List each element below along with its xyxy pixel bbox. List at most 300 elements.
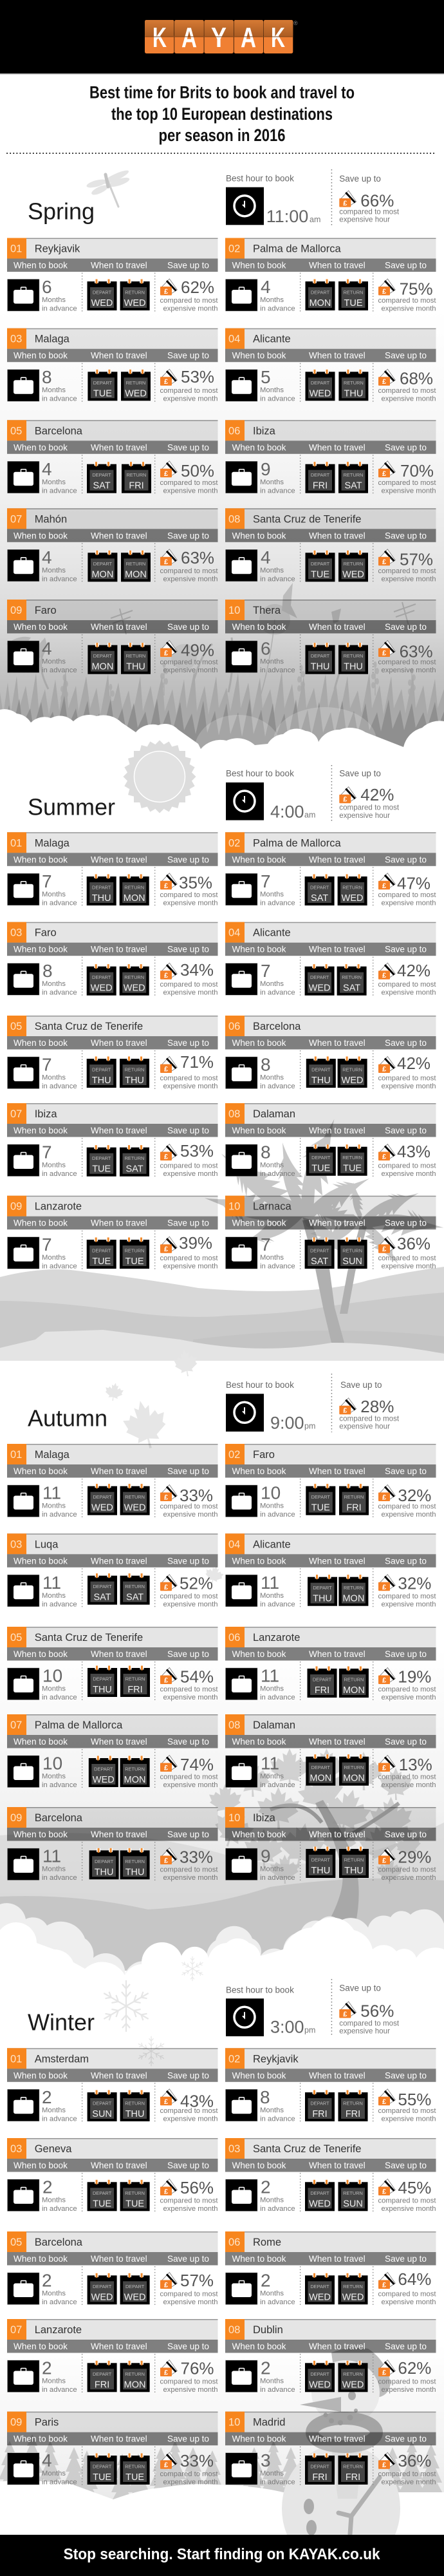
save up to: 52% <box>180 1574 213 1593</box>
card header: 06 <box>228 425 240 437</box>
KAYAK logo: ® <box>293 20 298 26</box>
card header <box>225 1807 436 1841</box>
when to travel: RETURN <box>125 1155 144 1161</box>
when to book: in advance <box>42 487 77 495</box>
when to travel <box>89 1756 150 1787</box>
when to travel <box>88 1573 150 1605</box>
card header: When to travel <box>309 2070 365 2080</box>
when to book: in advance <box>260 305 295 313</box>
when to book: in advance <box>42 2386 77 2394</box>
card header: When to book <box>232 1126 286 1135</box>
card header <box>7 1196 217 1229</box>
when to book: Months <box>42 980 66 988</box>
when to book <box>225 639 295 674</box>
card header: Save up to <box>167 260 209 270</box>
when to travel: MON <box>124 1775 146 1785</box>
card header: 08 <box>228 2324 240 2336</box>
save up to <box>160 2271 218 2306</box>
when to travel <box>87 964 149 996</box>
when to travel <box>306 1056 367 1088</box>
section header: Winter: 3:00 <box>270 2018 304 2037</box>
save up to: 63% <box>181 548 214 567</box>
save up to: expensive month <box>163 1511 217 1519</box>
card header: When to book <box>14 2342 68 2351</box>
save up to <box>160 278 218 313</box>
card header: Dublin <box>253 2324 283 2336</box>
when to travel: SAT <box>93 1593 111 1603</box>
card header: 04 <box>228 1539 240 1550</box>
save up to: compared to most <box>160 2470 218 2478</box>
save up to: 70% <box>400 461 434 480</box>
when to book: 3 <box>261 2450 271 2470</box>
card header: 02 <box>228 2053 240 2065</box>
when to travel: WED <box>342 1075 364 1086</box>
save up to: £ <box>382 558 386 566</box>
save up to: expensive month <box>381 1170 436 1178</box>
section header: Summer: compared to most <box>339 804 400 812</box>
header bar <box>0 0 444 75</box>
when to travel: THU <box>125 1075 144 1086</box>
when to book: in advance <box>260 2205 295 2213</box>
background: autumn gradient and hills <box>0 1649 444 1971</box>
when to travel: DEPART <box>93 1494 112 1500</box>
when to travel <box>305 551 368 582</box>
save up to <box>378 2178 436 2213</box>
when to book: Months <box>42 1592 66 1600</box>
card: Alicante <box>225 1533 436 1608</box>
card header: Ibiza <box>253 425 276 437</box>
when to book: 6 <box>42 277 52 297</box>
card header <box>7 1103 217 1137</box>
when to book: Months <box>260 2470 284 2477</box>
save up to: £ <box>164 972 168 980</box>
when to travel: SAT <box>93 481 111 491</box>
card: Malaga <box>7 1444 218 1519</box>
when to travel: THU <box>344 662 363 672</box>
card header: 05 <box>10 425 22 437</box>
when to travel: TUE <box>93 2199 111 2209</box>
when to book <box>225 2087 295 2123</box>
save up to: expensive month <box>163 989 217 997</box>
when to book <box>8 459 77 495</box>
when to travel <box>306 1144 367 1176</box>
illustration: spring plants <box>6 583 416 718</box>
card header: When to book <box>232 945 286 954</box>
save up to: compared to most <box>378 891 436 899</box>
save up to <box>160 960 218 997</box>
save up to: compared to most <box>378 297 436 305</box>
card: Faro <box>7 600 218 674</box>
when to travel: DEPART <box>93 2371 112 2377</box>
card header: When to travel <box>309 2254 365 2264</box>
when to book <box>225 1573 295 1608</box>
when to book: Months <box>42 1502 66 1510</box>
save up to: £ <box>382 882 386 890</box>
card header: 06 <box>228 1632 240 1643</box>
card header: When to travel <box>91 2070 147 2080</box>
save up to <box>378 1142 436 1178</box>
when to travel: RETURN <box>126 653 145 659</box>
when to travel: FRI <box>95 2380 109 2390</box>
when to travel: RETURN <box>344 561 363 567</box>
card header: When to travel <box>91 2342 147 2351</box>
footer: Stop searching. Start finding on KAYAK.co.uk <box>64 2546 380 2563</box>
save up to: compared to most <box>160 1162 218 1170</box>
when to book: in advance <box>260 1874 295 1882</box>
when to book: in advance <box>260 667 295 674</box>
when to travel: RETURN <box>125 290 145 295</box>
when to book <box>8 871 77 907</box>
card header: When to travel <box>309 1737 365 1747</box>
when to book: in advance <box>42 667 77 674</box>
card header: Save up to <box>385 855 427 864</box>
when to travel: RETURN <box>343 2190 363 2196</box>
when to travel: THU <box>311 662 329 672</box>
card header: When to travel <box>309 1038 365 1048</box>
card header: Palma de Mallorca <box>253 837 341 849</box>
card header: 08 <box>228 513 240 525</box>
section header: Winter: expensive hour <box>339 2027 390 2035</box>
when to travel: WED <box>309 2199 331 2209</box>
section header: Autumn: £ <box>343 1407 347 1415</box>
when to travel: THU <box>93 1685 112 1695</box>
card: Palma de Mallorca <box>225 238 436 313</box>
save up to: £ <box>382 1245 386 1253</box>
KAYAK logo: Y <box>211 22 227 53</box>
save up to: 55% <box>398 2090 431 2109</box>
card header: When to travel <box>91 1218 147 1228</box>
save up to: £ <box>164 1494 168 1502</box>
save up to: compared to most <box>160 567 218 575</box>
when to book: Months <box>260 2378 284 2385</box>
card header <box>7 922 217 956</box>
when to travel: MON <box>310 298 331 308</box>
section header: Autumn <box>28 1374 400 1432</box>
when to travel: DEPART <box>93 2463 112 2469</box>
when to travel: DEPART <box>92 974 111 980</box>
card header: When to book <box>14 622 68 632</box>
when to book: in advance <box>42 2115 77 2123</box>
when to book: Months <box>260 1502 284 1510</box>
card header: When to book <box>232 531 286 540</box>
when to travel: THU <box>92 893 111 904</box>
save up to: expensive month <box>381 989 436 997</box>
when to travel: DEPART <box>310 885 329 891</box>
card header <box>7 1807 217 1841</box>
when to travel: DEPART <box>93 1584 112 1589</box>
when to travel <box>88 2273 150 2304</box>
when to book: 7 <box>42 871 52 891</box>
card header <box>225 922 436 956</box>
save up to <box>378 1574 436 1608</box>
save up to: £ <box>164 2188 168 2196</box>
card header: Save up to <box>167 1466 209 1476</box>
card header: Santa Cruz de Tenerife <box>253 513 361 525</box>
card header: When to book <box>14 2070 68 2080</box>
when to travel: DEPART <box>311 1494 330 1500</box>
when to travel: RETURN <box>343 2101 363 2107</box>
save up to: compared to most <box>378 658 436 666</box>
save up to: £ <box>164 470 168 478</box>
card header: When to travel <box>309 531 365 540</box>
when to travel: WED <box>309 2380 331 2390</box>
KAYAK logo: A <box>181 22 197 53</box>
card header: When to travel <box>91 1649 147 1659</box>
when to travel: TUE <box>344 298 363 308</box>
when to travel: RETURN <box>126 380 145 386</box>
save up to: £ <box>382 2281 386 2289</box>
illustration: autumn falling leaves <box>104 1348 225 1586</box>
save up to: 64% <box>398 2269 431 2289</box>
card header: 08 <box>228 1719 240 1731</box>
card header: When to travel <box>91 531 147 540</box>
when to book <box>225 1665 295 1701</box>
when to book: in advance <box>42 1083 77 1090</box>
card header: When to travel <box>91 1126 147 1135</box>
when to travel: DEPART <box>93 561 113 567</box>
save up to <box>160 1848 218 1882</box>
save up to: expensive month <box>381 305 436 313</box>
card header <box>225 1016 436 1050</box>
card header: When to book <box>232 442 286 452</box>
when to book: 7 <box>42 1142 52 1162</box>
when to book <box>8 1573 77 1608</box>
when to travel: RETURN <box>343 2284 363 2289</box>
save up to: £ <box>164 649 168 657</box>
save up to <box>160 2451 218 2486</box>
save up to: expensive month <box>163 395 217 403</box>
card header: Thera <box>253 605 281 616</box>
card header: When to travel <box>309 945 365 954</box>
card header: Save up to <box>167 2254 209 2264</box>
save up to: compared to most <box>378 2470 436 2478</box>
KAYAK logo: K <box>271 22 285 53</box>
save up to: expensive month <box>163 1263 217 1271</box>
card header: Dalaman <box>253 1108 295 1120</box>
card header: Save up to <box>167 1830 209 1839</box>
card header <box>7 2412 217 2445</box>
when to travel: DEPART <box>311 653 330 659</box>
title <box>89 83 355 145</box>
when to travel: DEPART <box>125 2284 145 2289</box>
card header: Save up to <box>167 2070 209 2080</box>
when to travel: FRI <box>346 2472 360 2483</box>
when to book: 5 <box>261 367 271 387</box>
when to travel: WED <box>309 983 331 994</box>
card header: Luqa <box>35 1539 59 1550</box>
save up to: 47% <box>397 874 430 893</box>
when to travel: DEPART <box>93 2101 112 2107</box>
save up to <box>378 279 436 313</box>
save up to: expensive month <box>163 2298 217 2306</box>
card header: When to book <box>14 2254 68 2264</box>
when to book <box>8 1055 77 1090</box>
when to book: Months <box>260 2196 284 2204</box>
card header: Save up to <box>385 1649 427 1659</box>
card header: Dalaman <box>253 1719 295 1731</box>
when to travel: DEPART <box>92 885 111 891</box>
save up to <box>378 2451 436 2486</box>
save up to: £ <box>164 2369 168 2376</box>
save up to: 32% <box>398 1574 431 1593</box>
when to travel: FRI <box>312 2472 328 2483</box>
when to travel <box>87 875 149 905</box>
when to book: in advance <box>42 1600 77 1608</box>
card header: When to book <box>14 260 68 270</box>
save up to: compared to most <box>378 1162 436 1170</box>
save up to: compared to most <box>160 297 218 305</box>
save up to: £ <box>382 1765 386 1772</box>
card header: Save up to <box>167 1218 209 1228</box>
when to travel: RETURN <box>344 653 363 659</box>
when to travel: RETURN <box>125 1859 145 1864</box>
card header: Save up to <box>385 2254 427 2264</box>
when to book: in advance <box>42 2205 77 2213</box>
save up to: £ <box>164 378 168 386</box>
when to travel: FRI <box>127 1685 143 1695</box>
save up to <box>160 640 218 674</box>
illustration: snowman <box>282 2347 400 2573</box>
save up to: expensive month <box>163 2479 217 2486</box>
card header: When to book <box>232 1466 286 1476</box>
when to book: 4 <box>42 639 52 658</box>
when to travel: DEPART <box>311 290 330 295</box>
card header: Save up to <box>167 351 209 361</box>
section header: Summer: 42% <box>360 785 394 804</box>
when to book: 8 <box>42 367 52 387</box>
save up to: £ <box>164 288 168 296</box>
section header: Winter: compared to most <box>339 2020 400 2028</box>
card header: 02 <box>228 1449 240 1461</box>
card: Ibiza <box>7 1103 218 1178</box>
card: Santa Cruz de Tenerife <box>7 1627 218 1701</box>
when to travel: RETURN <box>124 974 144 980</box>
when to travel: MON <box>342 1594 364 1604</box>
save up to: compared to most <box>378 2107 436 2115</box>
save up to: £ <box>382 2188 386 2196</box>
card header: Faro <box>253 1449 275 1461</box>
when to travel: THU <box>92 1075 111 1086</box>
save up to <box>378 2358 436 2394</box>
save up to: £ <box>164 558 168 566</box>
section header: Autumn: pm <box>304 1421 315 1430</box>
when to travel <box>305 1238 367 1269</box>
when to travel: FRI <box>312 2109 328 2119</box>
when to travel: TUE <box>93 388 112 399</box>
card header: 02 <box>228 243 240 255</box>
card header: When to book <box>232 1218 286 1228</box>
when to book: Months <box>42 2107 66 2114</box>
card header: Save up to <box>167 531 209 540</box>
when to travel: DEPART <box>93 1676 112 1682</box>
save up to: £ <box>382 972 386 980</box>
card header <box>225 1533 436 1567</box>
when to book: 4 <box>261 277 271 297</box>
save up to: expensive month <box>381 2115 436 2123</box>
save up to: expensive month <box>381 395 436 403</box>
when to travel: RETURN <box>342 885 362 891</box>
when to travel: TUE <box>93 2472 111 2483</box>
section header: Winter: Best hour to book <box>226 1985 294 1994</box>
when to travel <box>88 2454 150 2485</box>
when to travel: DEPART <box>311 1066 331 1073</box>
when to travel: WED <box>124 983 145 994</box>
card header: Malaga <box>35 837 70 849</box>
card header: When to book <box>14 855 68 864</box>
when to book: in advance <box>260 1694 295 1701</box>
when to book: in advance <box>42 575 77 583</box>
save up to: £ <box>164 1584 168 1591</box>
save up to: £ <box>382 1584 386 1591</box>
save up to: 42% <box>397 961 430 980</box>
when to travel <box>88 2180 150 2211</box>
when to book: 8 <box>261 1055 271 1074</box>
when to travel: RETURN <box>342 1247 362 1253</box>
when to travel <box>305 370 368 401</box>
when to travel: DEPART <box>310 2463 329 2469</box>
save up to: 33% <box>180 2451 214 2470</box>
when to book <box>8 2358 77 2394</box>
card header: Mahón <box>35 513 67 525</box>
when to travel <box>308 1667 369 1698</box>
when to travel: FRI <box>346 2109 360 2119</box>
card header <box>7 2048 217 2082</box>
card header: Larnaca <box>253 1201 291 1213</box>
icon: dragonfly <box>86 168 131 207</box>
when to book: in advance <box>42 1874 77 1882</box>
card header: When to book <box>232 1038 286 1048</box>
save up to: 71% <box>180 1052 214 1072</box>
card header: 07 <box>10 1719 22 1731</box>
card header: When to travel <box>91 442 147 452</box>
when to travel <box>305 2180 368 2211</box>
when to travel: MON <box>343 1774 365 1784</box>
when to book: Months <box>260 1162 284 1170</box>
when to travel: DEPART <box>93 290 112 295</box>
when to book: in advance <box>260 2298 295 2306</box>
card: Barcelona <box>7 2231 218 2306</box>
card header: When to travel <box>91 1737 147 1747</box>
save up to: expensive month <box>381 2479 436 2486</box>
when to book: in advance <box>42 2298 77 2306</box>
when to book <box>225 1055 295 1090</box>
when to book <box>225 367 295 403</box>
when to travel: SAT <box>126 1593 143 1603</box>
when to book: in advance <box>260 487 295 495</box>
card header: When to travel <box>91 2161 147 2170</box>
save up to: 76% <box>180 2359 214 2378</box>
illustration: white clouds <box>0 709 444 760</box>
card header: When to travel <box>309 855 365 864</box>
card header: When to travel <box>309 2342 365 2351</box>
when to book: in advance <box>42 1781 77 1789</box>
card header: Alicante <box>253 1539 291 1550</box>
when to travel: WED <box>91 298 113 308</box>
card header: Save up to <box>167 622 209 632</box>
save up to <box>160 2359 218 2394</box>
card header: Save up to <box>167 2161 209 2170</box>
card header: Lanzarote <box>35 1201 82 1213</box>
card header: Save up to <box>167 1737 209 1747</box>
save up to: £ <box>164 1765 168 1772</box>
when to book: in advance <box>42 1170 77 1178</box>
card header: When to book <box>14 1038 68 1048</box>
card header: 01 <box>10 243 22 255</box>
card header: Save up to <box>167 945 209 954</box>
when to book <box>225 871 295 907</box>
when to travel <box>88 279 150 310</box>
when to travel: THU <box>311 1866 330 1876</box>
